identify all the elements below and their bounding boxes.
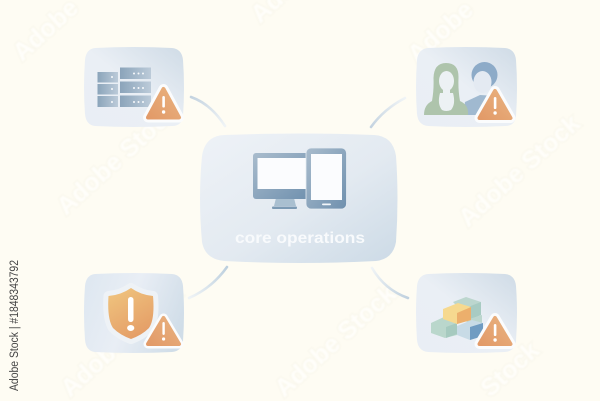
- icon: warning triangle: [480, 318, 510, 344]
- panel background: [84, 273, 184, 353]
- icon: tablet: [306, 148, 346, 209]
- panel background: [84, 47, 184, 127]
- connector: top left: [191, 97, 225, 126]
- icon: warning triangle: [148, 318, 179, 344]
- panel: blocks: [416, 273, 517, 353]
- icon: warning triangle: [480, 91, 510, 118]
- panel: core operations: [200, 134, 398, 263]
- panel: people: [416, 47, 517, 127]
- icon: woman: [424, 63, 468, 115]
- artwork: [9, 47, 517, 391]
- label: core operations: core operations: [235, 230, 365, 247]
- connector: top right: [371, 98, 405, 127]
- watermarks: Adobe Stock: [453, 109, 586, 232]
- watermarks: Adobe Stock: [55, 279, 188, 401]
- icon: shield: [108, 288, 154, 339]
- watermarks: Adobe Stock: [269, 279, 402, 401]
- icon: desktop monitor: [253, 153, 311, 209]
- icon: server racks: [98, 68, 151, 107]
- connector: bottom right: [372, 268, 408, 298]
- icon: stacked blocks: [431, 297, 483, 340]
- icon: man: [463, 62, 499, 115]
- panel: security: [84, 273, 184, 353]
- panel: servers: [84, 47, 184, 127]
- side credit: Adobe Stock | #1848343792: [9, 260, 21, 391]
- panel background: [416, 273, 517, 353]
- panel background: [200, 134, 398, 263]
- watermarks: Stock: [475, 336, 545, 401]
- watermarks: Adobe Stock: [51, 97, 184, 220]
- panel background: [416, 47, 517, 127]
- connector: bottom left: [189, 267, 227, 298]
- icon: warning triangle: [148, 89, 179, 118]
